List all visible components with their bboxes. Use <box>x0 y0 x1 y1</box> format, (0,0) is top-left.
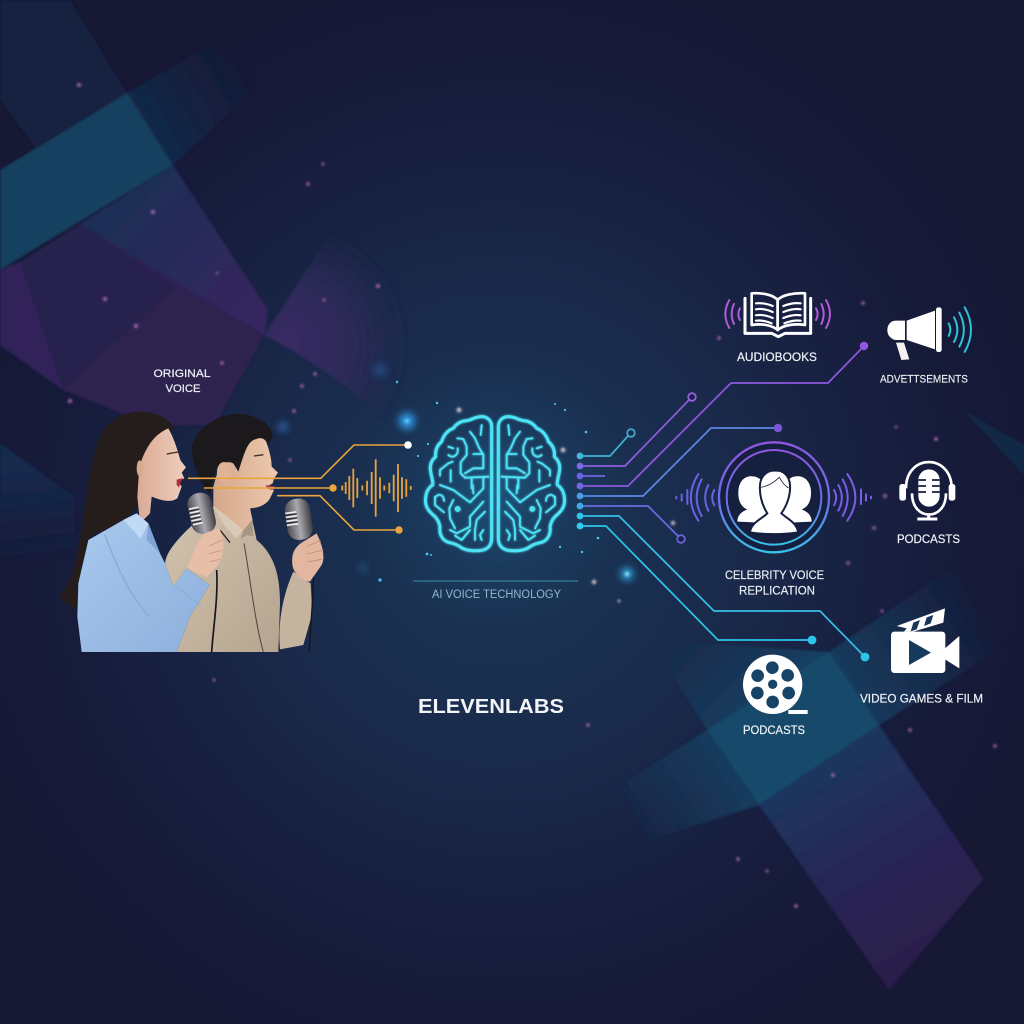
label: AI voice technology: AI VOICE TECHNOLOGY <box>432 589 561 601</box>
circuit lines from brain to outputs <box>580 346 865 657</box>
left hemisphere <box>425 417 492 551</box>
heading: original voice: ORIGINAL <box>154 368 210 380</box>
label: celebrity voice replication: REPLICATION <box>739 584 815 598</box>
microphone 1 <box>185 491 230 652</box>
sound arcs <box>725 300 830 328</box>
icon: clapperboard video camera <box>891 608 959 673</box>
icon: megaphone <box>887 307 971 360</box>
open book <box>745 293 811 337</box>
star field <box>68 83 997 908</box>
label: audiobooks: AUDIOBOOKS <box>737 350 817 364</box>
circuit nodes <box>577 342 869 661</box>
man <box>165 414 312 652</box>
label: podcasts: PODCASTS <box>897 532 960 546</box>
concentric rings <box>719 442 829 552</box>
microphone 2 <box>283 497 323 652</box>
label: celebrity voice replication <box>725 568 824 598</box>
icon: audiobook <box>725 293 830 337</box>
woman <box>59 412 209 652</box>
illustration: two singers with microphones <box>59 412 323 652</box>
label: advertisements as printed: ADVETTSEMENTS <box>880 374 968 386</box>
icon: film reel <box>743 655 808 714</box>
icon: podcast microphone with headset <box>899 462 955 519</box>
label: celebrity voice replication: CELEBRITY VOICE <box>725 568 824 582</box>
brain icon <box>425 417 565 551</box>
logo: ElevenLabs: ELEVENLABS <box>418 695 564 718</box>
heading: original voice <box>154 368 210 395</box>
right hemisphere <box>498 417 565 551</box>
three people <box>737 471 812 534</box>
signal end dots <box>329 441 412 534</box>
icon: celebrity voice replication <box>676 442 871 552</box>
heading: original voice: VOICE <box>166 383 200 395</box>
label: video games and film: VIDEO GAMES & FILM <box>860 692 983 706</box>
audio waveform <box>342 459 411 517</box>
label: podcasts, lower: PODCASTS <box>743 723 805 737</box>
left sound waves <box>676 474 714 521</box>
voice signal lines <box>188 445 408 530</box>
right sound waves <box>834 474 871 521</box>
